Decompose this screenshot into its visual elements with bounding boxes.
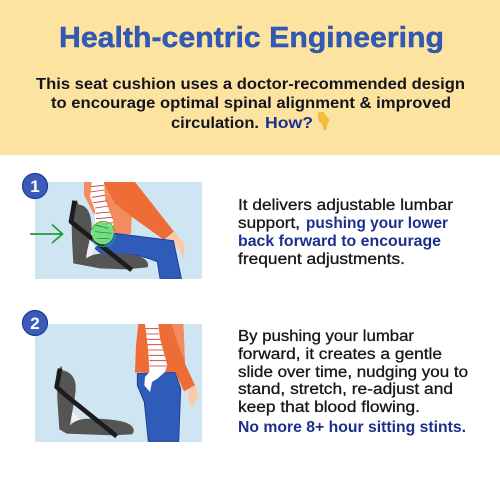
step 1 text	[238, 197, 453, 268]
badge 2	[22, 310, 48, 336]
torso	[84, 182, 132, 235]
intro text: How?	[265, 115, 313, 132]
step 2 text: stand, stretch, re-adjust and	[238, 381, 453, 398]
step 2 text: slide over time, nudging you to	[238, 364, 468, 381]
strap	[57, 369, 117, 436]
panel: step 2 background	[35, 324, 202, 442]
badge 2: 2	[30, 314, 40, 333]
header panel	[0, 0, 500, 155]
intro text	[36, 76, 465, 132]
step 1 text: back forward to encourage	[238, 233, 441, 250]
step 2 text: keep that blood flowing.	[238, 399, 420, 416]
step 1 text: pushing your lower	[306, 215, 448, 232]
hand	[188, 385, 199, 408]
intro text: This seat cushion uses a doctor-recommended design	[36, 76, 465, 93]
spine	[90, 182, 113, 227]
spine	[144, 324, 167, 392]
cushion	[57, 366, 134, 435]
hand	[167, 232, 185, 260]
legs	[95, 233, 181, 278]
intro text: circulation.	[171, 115, 259, 132]
intro text: to encourage optimal spinal alignment & improved	[51, 95, 451, 112]
step 1 text: It delivers adjustable lumbar	[238, 197, 453, 214]
arrow: green push	[30, 224, 62, 243]
badge 1: 1	[30, 177, 40, 196]
title: Health-centric Engineering	[59, 22, 444, 54]
icon: pointing down hand	[318, 112, 329, 130]
white gap	[71, 409, 80, 425]
cushion	[71, 200, 148, 269]
step 2 text: No more 8+ hour sitting stints.	[238, 419, 466, 436]
step 1 text: support,	[238, 215, 300, 232]
legs	[137, 372, 181, 441]
step 2 text	[238, 328, 468, 436]
step 1 text: frequent adjustments.	[238, 251, 405, 268]
shirt	[135, 324, 195, 391]
step 2 text: forward, it creates a gentle	[238, 346, 442, 363]
arm	[103, 182, 174, 240]
step 2 text: By pushing your lumbar	[238, 328, 414, 345]
strap	[71, 201, 132, 270]
white lumbar gap	[85, 235, 95, 257]
panel: step 1 background	[35, 182, 202, 279]
badge 1	[22, 174, 48, 198]
illustration: step 1 seated figure	[71, 182, 185, 278]
illustration: step 2 standing figure	[57, 324, 199, 441]
green highlight circle	[92, 222, 115, 247]
